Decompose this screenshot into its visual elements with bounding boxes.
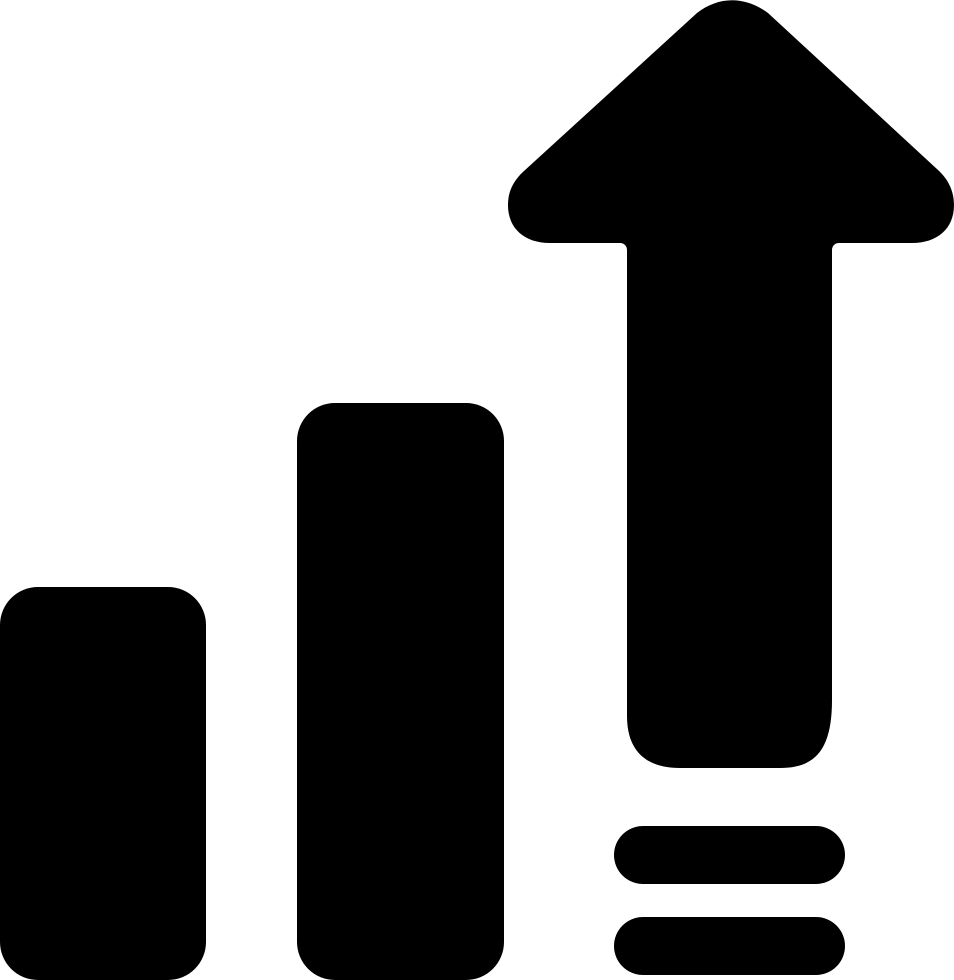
up arrow: [508, 0, 954, 768]
short bar: [0, 587, 206, 980]
lower dash: [614, 917, 845, 975]
upper dash: [614, 826, 845, 884]
medium bar: [297, 403, 504, 980]
